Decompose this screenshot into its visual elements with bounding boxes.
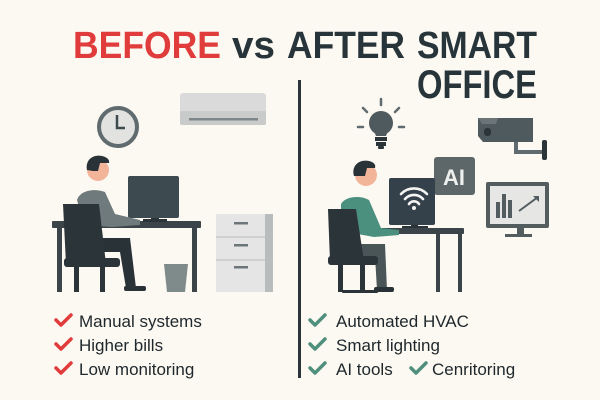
- list: before: Higher bills: [79, 336, 163, 355]
- panel: before scene: [52, 93, 273, 292]
- desk: [52, 221, 201, 292]
- desk: [373, 228, 464, 292]
- chair: [328, 209, 378, 293]
- icon: cabinet: [216, 214, 273, 292]
- icon: light bulb: [358, 99, 404, 149]
- title: [73, 25, 537, 107]
- monitor: [128, 176, 179, 222]
- list: after: AI tools: [336, 360, 393, 379]
- divider: [298, 80, 301, 378]
- list: before: [56, 312, 202, 379]
- person: [341, 161, 399, 292]
- person: [77, 156, 146, 291]
- icon: clock: [99, 108, 137, 146]
- title: SMART: [417, 25, 537, 67]
- list: before: Low monitoring: [79, 360, 194, 379]
- icon: security camera: [478, 118, 547, 160]
- icon: air conditioner: [180, 93, 266, 125]
- title: BEFORE: [73, 25, 221, 67]
- title: OFFICE: [417, 63, 537, 107]
- icon: trash bin: [164, 264, 188, 292]
- chart monitor: [486, 182, 549, 237]
- list: after: Automated HVAC: [336, 312, 469, 331]
- panel: after scene: [328, 99, 549, 293]
- icon: AI badge: AI: [443, 165, 465, 190]
- icon: AI badge: [434, 157, 475, 195]
- list: after: [310, 312, 515, 379]
- title: vs: [232, 25, 275, 67]
- list: before: Manual systems: [79, 312, 202, 331]
- list: after: Cenritoring: [432, 360, 515, 379]
- chair: [63, 204, 120, 292]
- list: after: Smart lighting: [336, 336, 440, 355]
- title: AFTER: [287, 25, 405, 67]
- monitor with wifi: [389, 178, 435, 229]
